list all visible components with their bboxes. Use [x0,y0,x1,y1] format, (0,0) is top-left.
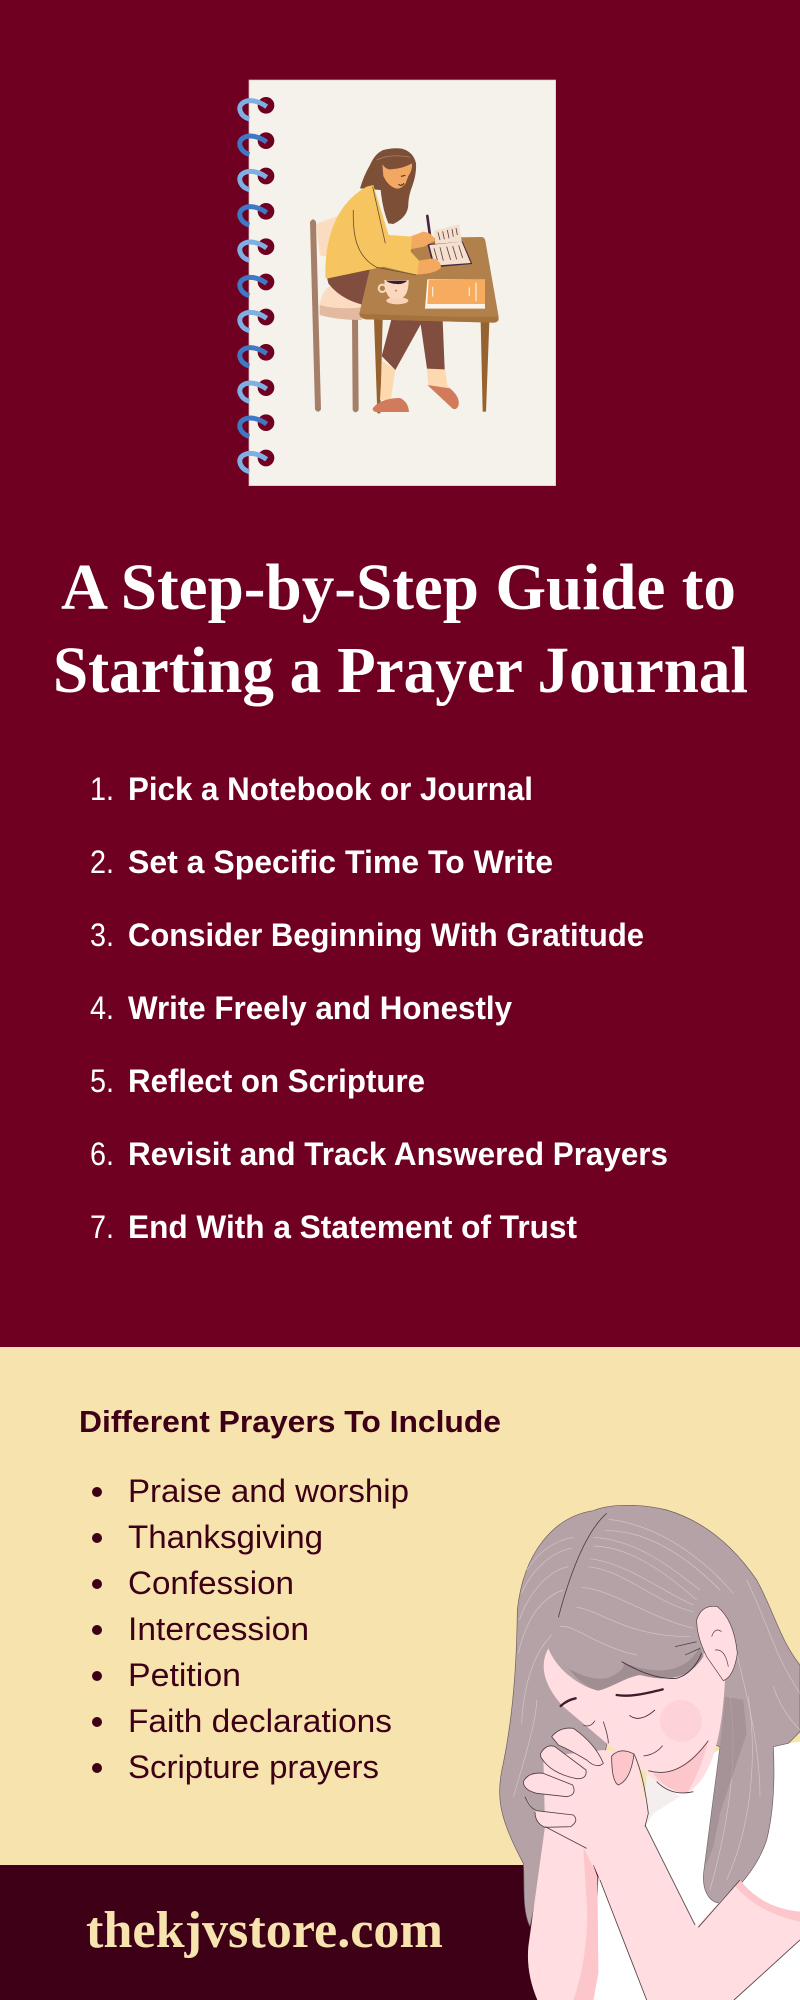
icon: praying girl with long grey hair [500,1505,800,2000]
step 1: 1. [90,771,114,807]
footer website url: thekjvstore.com [86,1902,443,1959]
step 5: Reflect on Scripture [128,1063,425,1099]
woman's legs and slippers [373,318,459,412]
right hair shadow [704,1697,747,1870]
step 2: Set a Specific Time To Write [128,844,553,880]
step 1: Pick a Notebook or Journal [128,771,533,807]
step 4: 4. [90,990,114,1026]
bullet: praise: Praise and worship [128,1473,409,1509]
panel: maroon header background [0,0,800,1347]
blush and closed eyes [561,1689,708,1793]
step 5: 5. [90,1063,114,1099]
step 2: 2. [90,844,114,880]
woman's yellow sweater [325,185,419,279]
face shadow along jaw [653,1741,708,1793]
open journal and pen [427,216,472,267]
step 3: Consider Beginning With Gratitude [128,917,644,953]
face [544,1648,725,1793]
chair [310,215,362,412]
hair back mass [500,1505,800,1927]
title [53,551,748,707]
step 4: Write Freely and Honestly [128,990,512,1026]
desk legs [374,318,489,413]
hair top and fringe [547,1511,707,1691]
title line two: Starting a Prayer Journal [53,634,748,707]
bullet: petition: Petition [128,1657,241,1693]
woman's thigh [327,265,377,307]
step 7: End With a Statement of Trust [128,1209,577,1245]
desk top [359,237,499,323]
bullet: thanksgiving: Thanksgiving [128,1519,323,1555]
coffee cup on saucer [379,280,409,304]
step 3: 3. [90,917,114,953]
bullet: faith declarations: Faith declarations [128,1703,392,1739]
white shirt [593,1742,800,2000]
notebook page [249,80,556,486]
bulleted list of prayer types [92,1473,409,1785]
numbered list of steps [90,771,668,1245]
bullet: intercession: Intercession [128,1611,309,1647]
step 6: Revisit and Track Answered Prayers [128,1136,668,1172]
spiral binding rings [240,97,274,472]
title line one: A Step-by-Step Guide to [61,551,736,624]
hair strands [513,1519,800,1890]
step 7: 7. [90,1209,114,1245]
panel: cream prayers section background [0,1347,800,1866]
icon: spiral notebook with woman journaling at desk [240,80,556,486]
woman's hands [410,232,441,274]
bullet: scripture prayers: Scripture prayers [128,1749,379,1785]
bullet: confession: Confession [128,1565,294,1601]
ear [697,1606,737,1681]
orange closed book [425,279,485,309]
woman's hair and face [360,148,416,224]
heading: different prayers: Different Prayers To Include [79,1404,501,1439]
arm and chest skin [528,1825,800,2000]
step 6: 6. [90,1136,114,1172]
panel: dark footer band [0,1865,800,2000]
clasped hands [523,1728,648,1850]
